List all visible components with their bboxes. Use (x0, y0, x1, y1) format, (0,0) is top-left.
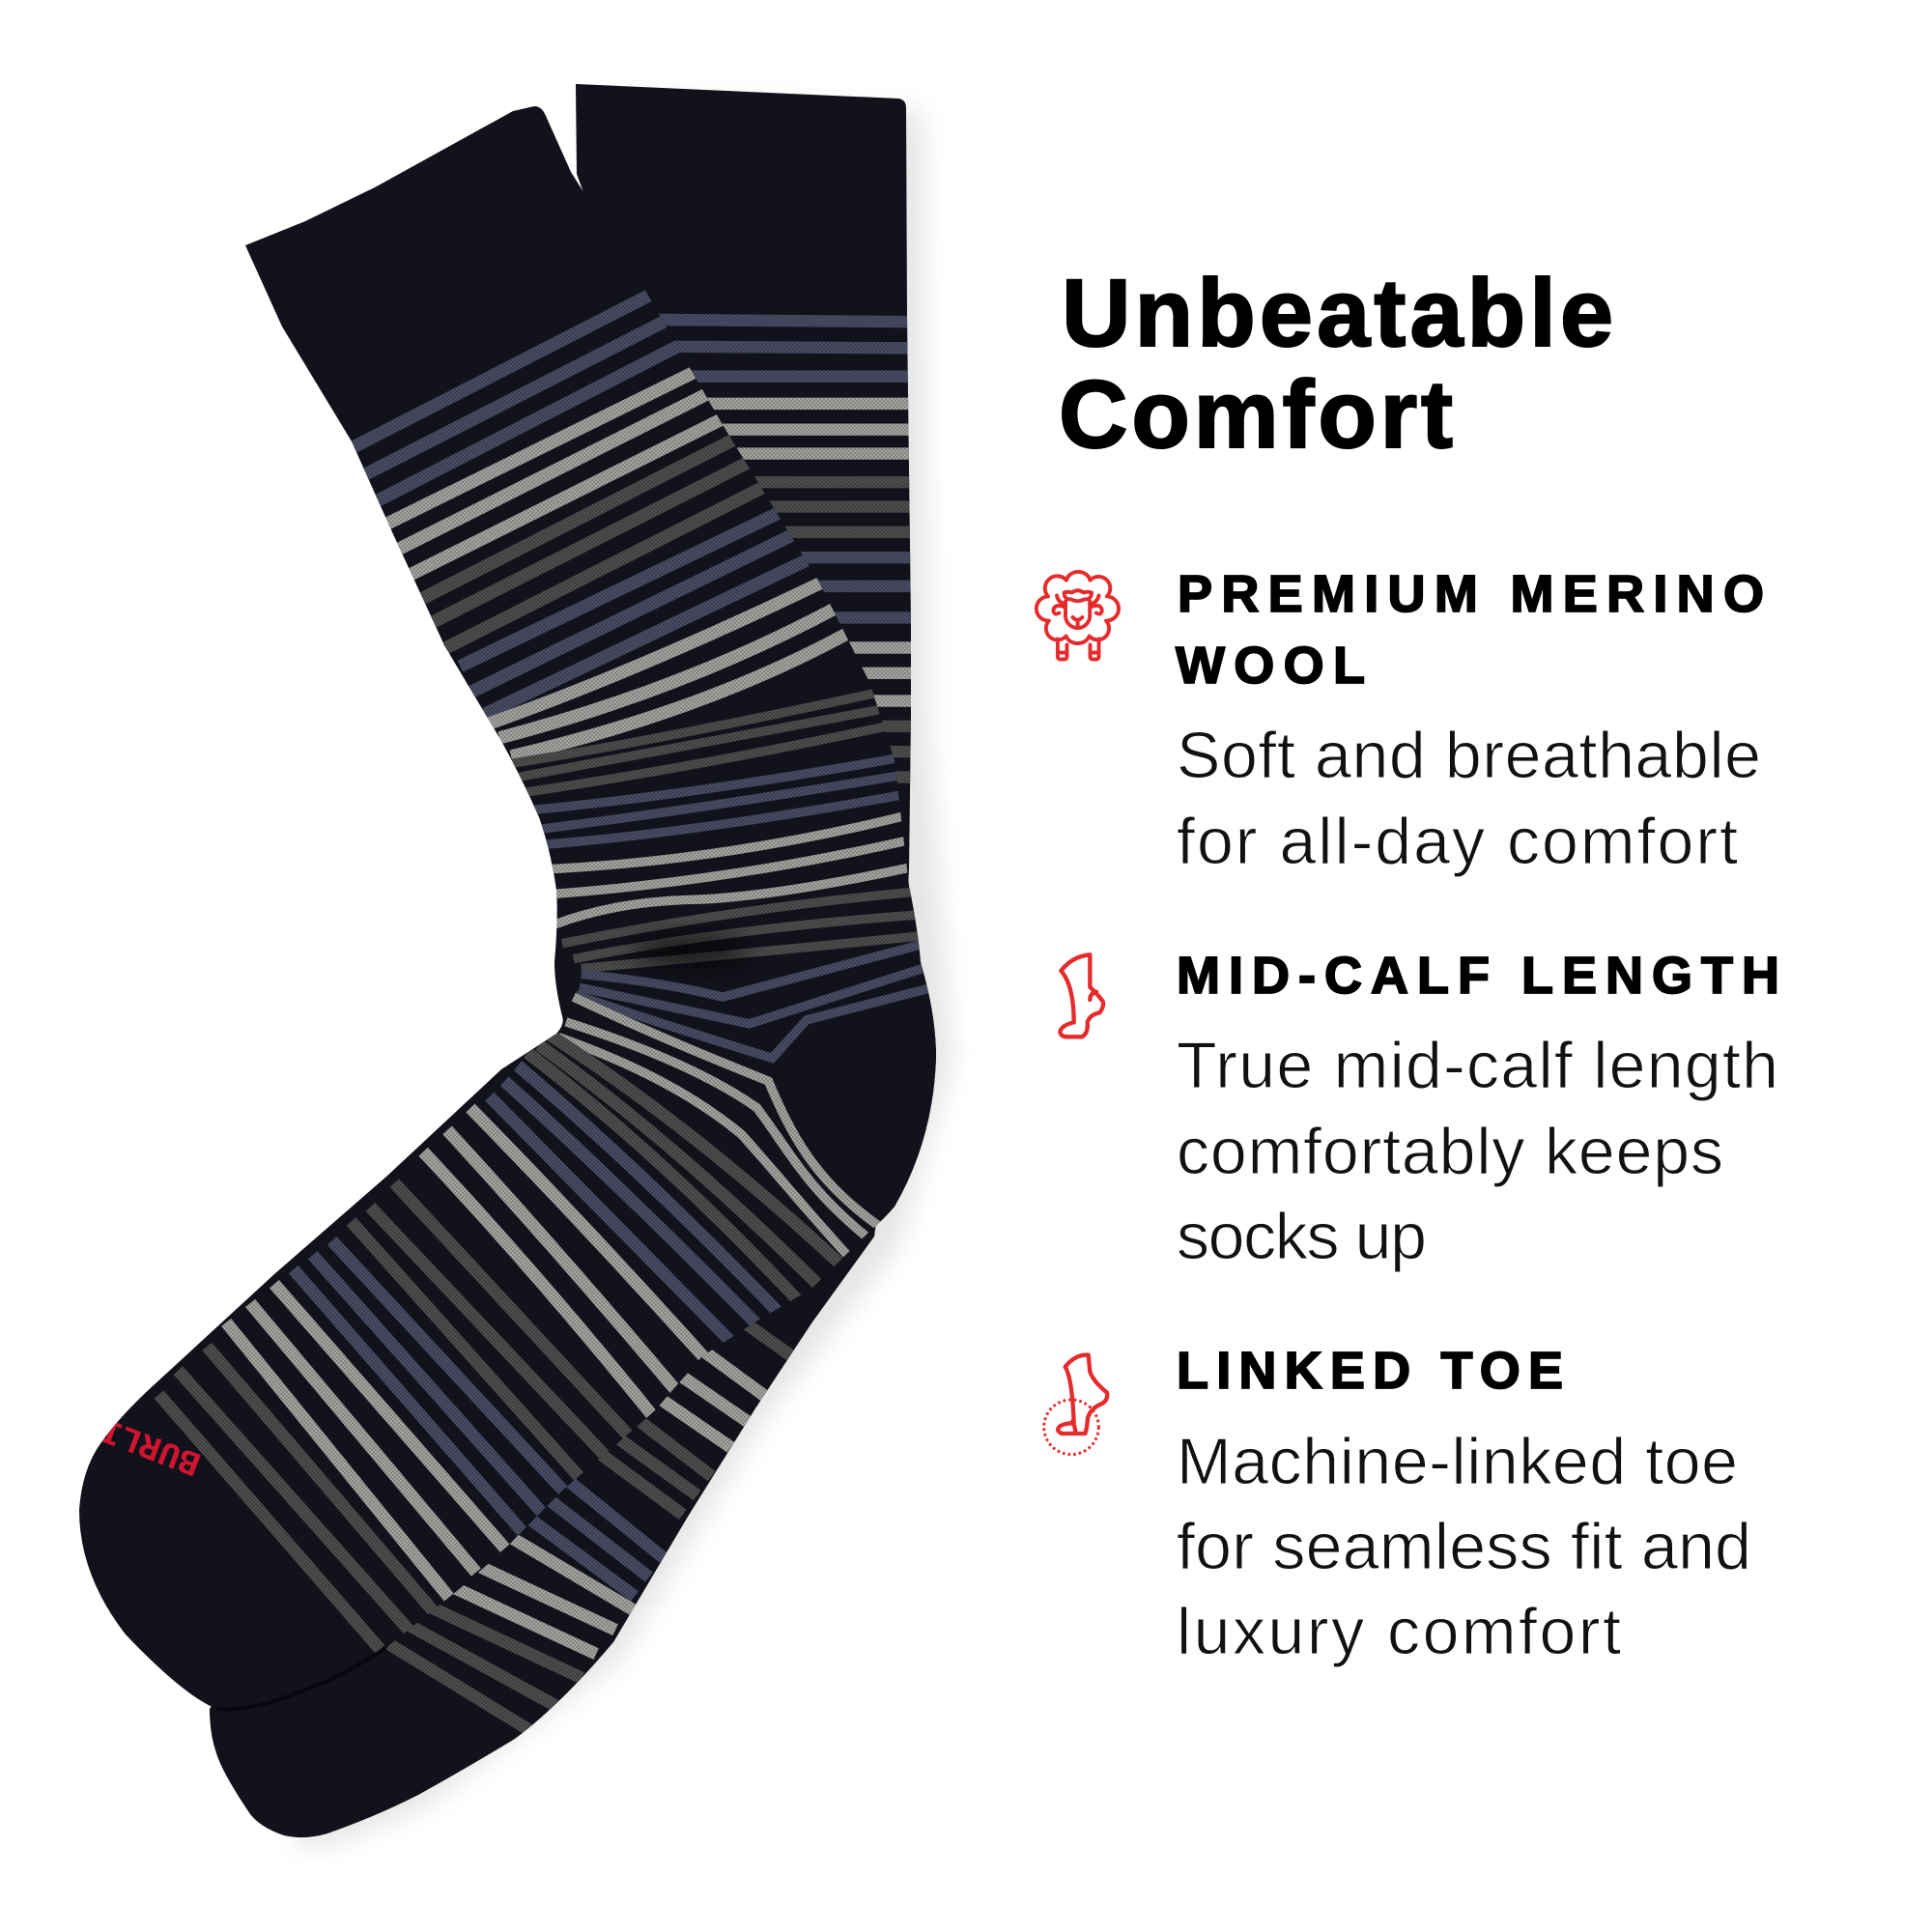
feature: mid-calf length (1060, 947, 1779, 1273)
socks photo illustration (58, 77, 966, 1864)
sock shadow (290, 97, 952, 1845)
heel block (881, 995, 936, 1221)
feature: mid-calf length: comfortably keeps (1177, 1115, 1723, 1188)
icon: sock mid-calf (1060, 954, 1103, 1037)
body text: Soft and breathable (1177, 719, 1761, 792)
heading: MID-CALF LENGTH (1177, 947, 1779, 1005)
feature: premium merino wool (1037, 565, 1764, 878)
front sock ankle stripes (512, 692, 932, 1058)
title (1059, 259, 1613, 468)
title: Unbeatable (1062, 259, 1613, 366)
feature: linked toe: for seamless fit and (1177, 1510, 1751, 1583)
back sock foot stripes (389, 1313, 811, 1736)
body text: True mid-calf length (1177, 1029, 1778, 1102)
sock brand text: BURLI (95, 1408, 207, 1483)
feature: linked toe: luxury comfort (1177, 1595, 1621, 1668)
ankle crease shadow (633, 936, 749, 967)
knit texture (58, 87, 966, 1729)
front sock upper leg stripes (347, 295, 851, 756)
front sock upper foot stripes (558, 997, 879, 1261)
back sock (210, 84, 911, 1837)
heading: PREMIUM MERINO (1178, 565, 1764, 623)
feature: premium merino wool: for all-day comfort (1177, 805, 1738, 878)
knit texture (210, 84, 911, 1837)
icon: sheep (1037, 572, 1119, 659)
front sock foot and toe stripes (158, 1036, 846, 1649)
heading: LINKED TOE (1177, 1342, 1563, 1400)
feature: linked toe (1044, 1342, 1751, 1668)
title: Comfort (1059, 360, 1453, 468)
toe seam between socks (216, 1649, 384, 1709)
front sock (58, 87, 966, 1729)
feature: premium merino wool: WOOL (1176, 637, 1365, 695)
icon: toe with dotted circle (1044, 1355, 1107, 1455)
back sock leg stripes (639, 320, 916, 777)
feature: mid-calf length: socks up (1177, 1200, 1427, 1273)
body text: Machine-linked toe (1177, 1425, 1738, 1498)
